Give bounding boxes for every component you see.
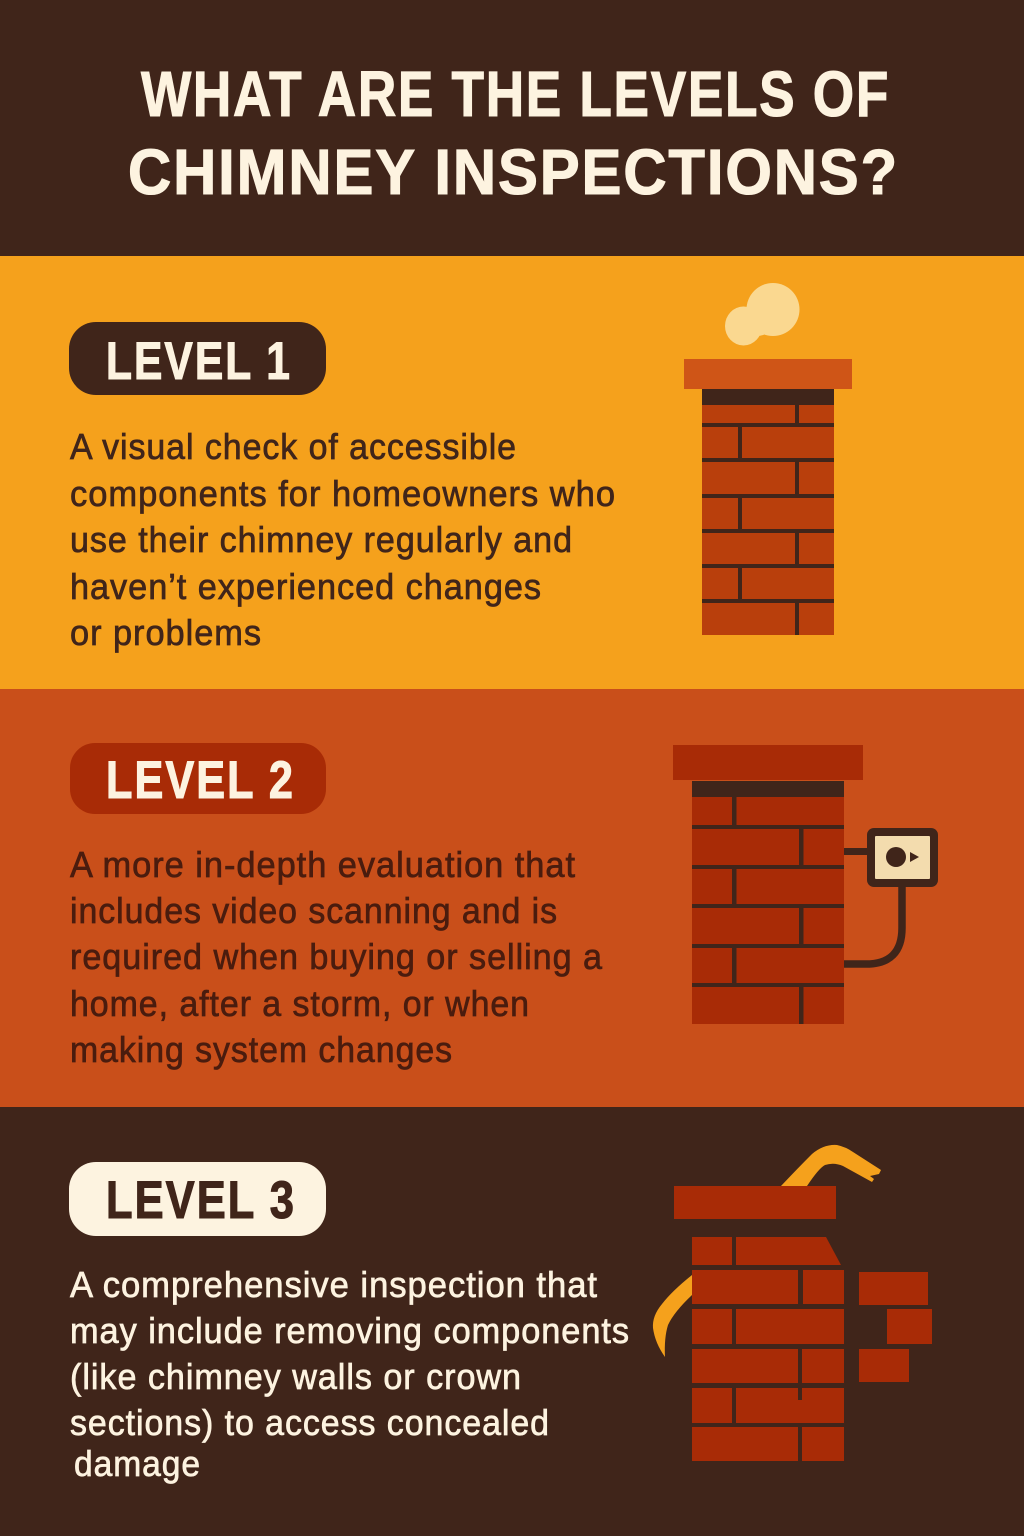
- level 2 badge: [70, 743, 326, 814]
- chimney bricks: [692, 1237, 844, 1461]
- icon: chimney with video scanner: [673, 745, 938, 1024]
- level 1 badge: [69, 322, 326, 395]
- loose bricks: [859, 1272, 932, 1382]
- level 2 description: includes video scanning and is: [70, 890, 558, 931]
- level 3 description: damage: [74, 1443, 201, 1484]
- level 1 description: haven’t experienced changes: [70, 566, 542, 607]
- level 1 description: [70, 426, 616, 653]
- title: CHIMNEY INSPECTIONS?: [128, 136, 899, 208]
- title: WHAT ARE THE LEVELS OF: [141, 58, 890, 130]
- level 3 description: (like chimney walls or crown: [70, 1356, 522, 1397]
- icon: video camera scanner and cable: [844, 828, 938, 964]
- panel: level 1: [0, 256, 1024, 689]
- icon: deconstructed chimney with inspection tools: [653, 1145, 932, 1461]
- level 1 badge: LEVEL 1: [106, 332, 292, 391]
- icon: smoke puff: [725, 283, 800, 346]
- level 3 badge: [69, 1162, 326, 1236]
- level 2 description: A more in-depth evaluation that: [70, 844, 576, 885]
- icon: chimney with smoke: [684, 283, 852, 635]
- level 3 description: [70, 1264, 630, 1484]
- level 2 badge: LEVEL 2: [106, 751, 295, 810]
- level 2 description: making system changes: [70, 1029, 453, 1070]
- level 3 description: sections) to access concealed: [70, 1402, 550, 1443]
- level 2 description: [70, 844, 603, 1070]
- level 2 description: required when buying or selling a: [70, 936, 603, 977]
- level 1 description: use their chimney regularly and: [70, 519, 573, 560]
- title: [128, 58, 899, 208]
- level 1 description: A visual check of accessible: [70, 426, 517, 467]
- level 1 description: or problems: [70, 612, 262, 653]
- header band: [0, 0, 1024, 256]
- icon: upper probe: [781, 1145, 881, 1186]
- level 2 description: home, after a storm, or when: [70, 983, 530, 1024]
- level 3 badge: LEVEL 3: [106, 1171, 296, 1230]
- chimney crown: [674, 1186, 836, 1219]
- icon: lower probe: [653, 1275, 692, 1357]
- panel: level 2: [0, 689, 1024, 1107]
- level 3 description: A comprehensive inspection that: [70, 1264, 598, 1305]
- level 3 description: may include removing components: [70, 1310, 630, 1351]
- level 1 description: components for homeowners who: [70, 473, 616, 514]
- panel: level 3: [0, 1107, 1024, 1536]
